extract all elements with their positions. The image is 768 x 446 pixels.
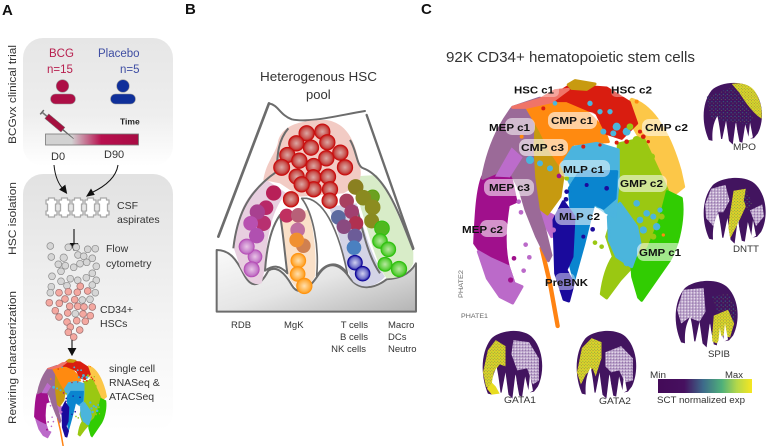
pale dome: stem cell pool (263, 120, 361, 197)
label: MEP c1 (489, 118, 535, 135)
BCG group label: n=15 (47, 64, 73, 76)
scattered cell dots (526, 101, 663, 266)
arrow to sequencing (68, 340, 76, 355)
Placebo group label: Placebo (98, 48, 140, 60)
label: MLP c2: MLP c2 (559, 211, 600, 223)
background: clinical trial card (23, 38, 173, 166)
lineage label: lymphoid: NK cells (331, 344, 366, 355)
label: CMP c2: CMP c2 (645, 122, 688, 134)
pale lobe: MgK lineage (282, 210, 316, 292)
label: HSC c2: HSC c2 (611, 84, 652, 96)
label: MEP c2 (462, 220, 508, 237)
label: PreBNK (545, 273, 588, 290)
side label: HSC isolation: HSC isolation (7, 182, 19, 255)
CSF aspirates label: CSF (117, 200, 138, 212)
side label: clinical trial: BCGvx clinical trial (7, 45, 19, 144)
Placebo group label (98, 48, 140, 76)
main PHATE map (475, 81, 684, 326)
flow cytometry grey cells (47, 243, 100, 317)
panel letter A: A (2, 2, 13, 19)
gene name GATA1: GATA1 (504, 395, 536, 405)
flow cytometry label: cytometry (106, 258, 152, 270)
side label: rewiring characterization: Rewiring characterization (7, 291, 19, 424)
gene name GATA2: GATA2 (599, 396, 631, 406)
sequencing label: ATACSeq (109, 391, 154, 403)
pale lobe: lymphoid lineage (328, 203, 385, 286)
landscape base (217, 250, 416, 312)
label: MLP c2 (555, 208, 605, 225)
color scale legend (650, 370, 752, 405)
panel B: HSC landscape (217, 69, 417, 355)
label: GMP c1 (637, 243, 683, 261)
arrow from D90 (87, 165, 118, 196)
lineage label: RDB: RDB (231, 320, 251, 331)
lineage label: myeloid (388, 320, 417, 355)
pale lobe: myeloid lineage (350, 175, 413, 278)
panel C heading: 92K CD34+ hematopoietic stem cells (446, 50, 695, 66)
lineage label: lymphoid: B cells (340, 332, 368, 343)
D0 label: D0 (51, 151, 65, 163)
D90 label: D90 (104, 149, 124, 161)
label: MEP c2: MEP c2 (462, 224, 503, 236)
mini PHATE map (35, 359, 106, 446)
arrow to cytometry (70, 229, 78, 250)
landscape title: pool (306, 87, 331, 102)
white valleys and ridge lines (233, 128, 413, 276)
CD34+ HSCs label (100, 304, 133, 330)
label: PreBNK: PreBNK (545, 277, 588, 289)
gene name MPO: MPO (733, 142, 756, 152)
background: isolation and characterization card (23, 174, 173, 432)
CSF aspirates label: aspirates (117, 214, 160, 226)
label: HSC c1: HSC c1 (514, 84, 554, 96)
cluster labels (462, 84, 688, 290)
lineage label: myeloid: DCs (388, 332, 407, 343)
gene map: DNTT (704, 178, 766, 244)
label: MEP c1: MEP c1 (489, 122, 530, 134)
panel A: clinical workflow (7, 38, 173, 446)
gene map: GATA2 (577, 331, 636, 399)
CD34+ HSCs label: HSCs (100, 318, 127, 330)
Placebo group label: n=5 (120, 64, 140, 76)
label: CMP c1: CMP c1 (551, 115, 593, 127)
flow cytometry label: Flow (106, 243, 129, 255)
gene name SPIB: SPIB (708, 349, 730, 359)
label: MEP c3: MEP c3 (489, 182, 530, 194)
label: GMP c2: GMP c2 (620, 178, 663, 190)
cells: megakaryocyte orange (280, 208, 312, 294)
label: CMP c3: CMP c3 (521, 142, 564, 154)
cells: stem cells red (274, 124, 353, 208)
icon: placebo participant (110, 80, 136, 104)
label: CMP c2 (642, 119, 688, 136)
gene name DNTT: DNTT (733, 244, 760, 254)
icon: syringe (40, 109, 76, 141)
arrow from D0 (54, 165, 66, 193)
cells: lymphoid blue (331, 194, 370, 281)
pale lobe: RDB lineage (233, 180, 287, 284)
gene map: GATA1 (483, 331, 542, 399)
CD34+ selected pink cells (46, 283, 96, 340)
icon: BCG participant (50, 80, 76, 104)
BCG group label: BCG (49, 48, 74, 60)
sequencing label: RNASeq & (109, 377, 160, 389)
color scale legend: SCT normalized exp (657, 395, 745, 405)
landscape title (260, 69, 377, 102)
time label: Time (120, 116, 140, 126)
lineage label: lymphoid: T cells (341, 320, 368, 331)
lineage label: MgK: MgK (284, 320, 304, 331)
cells: myeloid green (348, 180, 407, 277)
gene map: SPIB (676, 281, 738, 347)
label: CMP c1 (548, 112, 597, 129)
cells: erythroid purple (239, 185, 281, 277)
axis label PHATE1: PHATE1 (461, 313, 488, 320)
label: GMP c1: GMP c1 (639, 247, 681, 259)
label: MLP c1: MLP c1 (563, 164, 604, 176)
sequencing label: single cell (109, 363, 155, 375)
label: MLP c1 (559, 160, 610, 177)
flow cytometry label (106, 243, 152, 270)
lineage label: myeloid: Macro (388, 320, 414, 331)
axis label PHATE2: PHATE2 (458, 270, 465, 298)
gene map: MPO (704, 83, 762, 145)
sequencing label (109, 363, 160, 403)
streak: PreBNK lineage (542, 248, 558, 326)
color scale legend: Max (725, 370, 744, 380)
label: MEP c3 (484, 179, 534, 196)
label: GMP c2 (618, 175, 667, 192)
CSF aspirates label (117, 200, 160, 226)
lineage label: lymphoid (331, 320, 368, 355)
label: CMP c3 (519, 139, 568, 156)
CD34+ HSCs label: CD34+ (100, 304, 133, 316)
landscape outer walls (218, 103, 413, 248)
landscape title: Heterogenous HSC (260, 69, 377, 84)
panel letter C: C (421, 1, 432, 18)
color scale legend: Min (650, 370, 666, 380)
panel letter B: B (185, 1, 196, 18)
BCG group label (47, 48, 74, 76)
timeline bar (46, 134, 138, 145)
lineage label: myeloid: Neutro (388, 344, 417, 355)
icon: spine vertebrae (46, 198, 109, 217)
